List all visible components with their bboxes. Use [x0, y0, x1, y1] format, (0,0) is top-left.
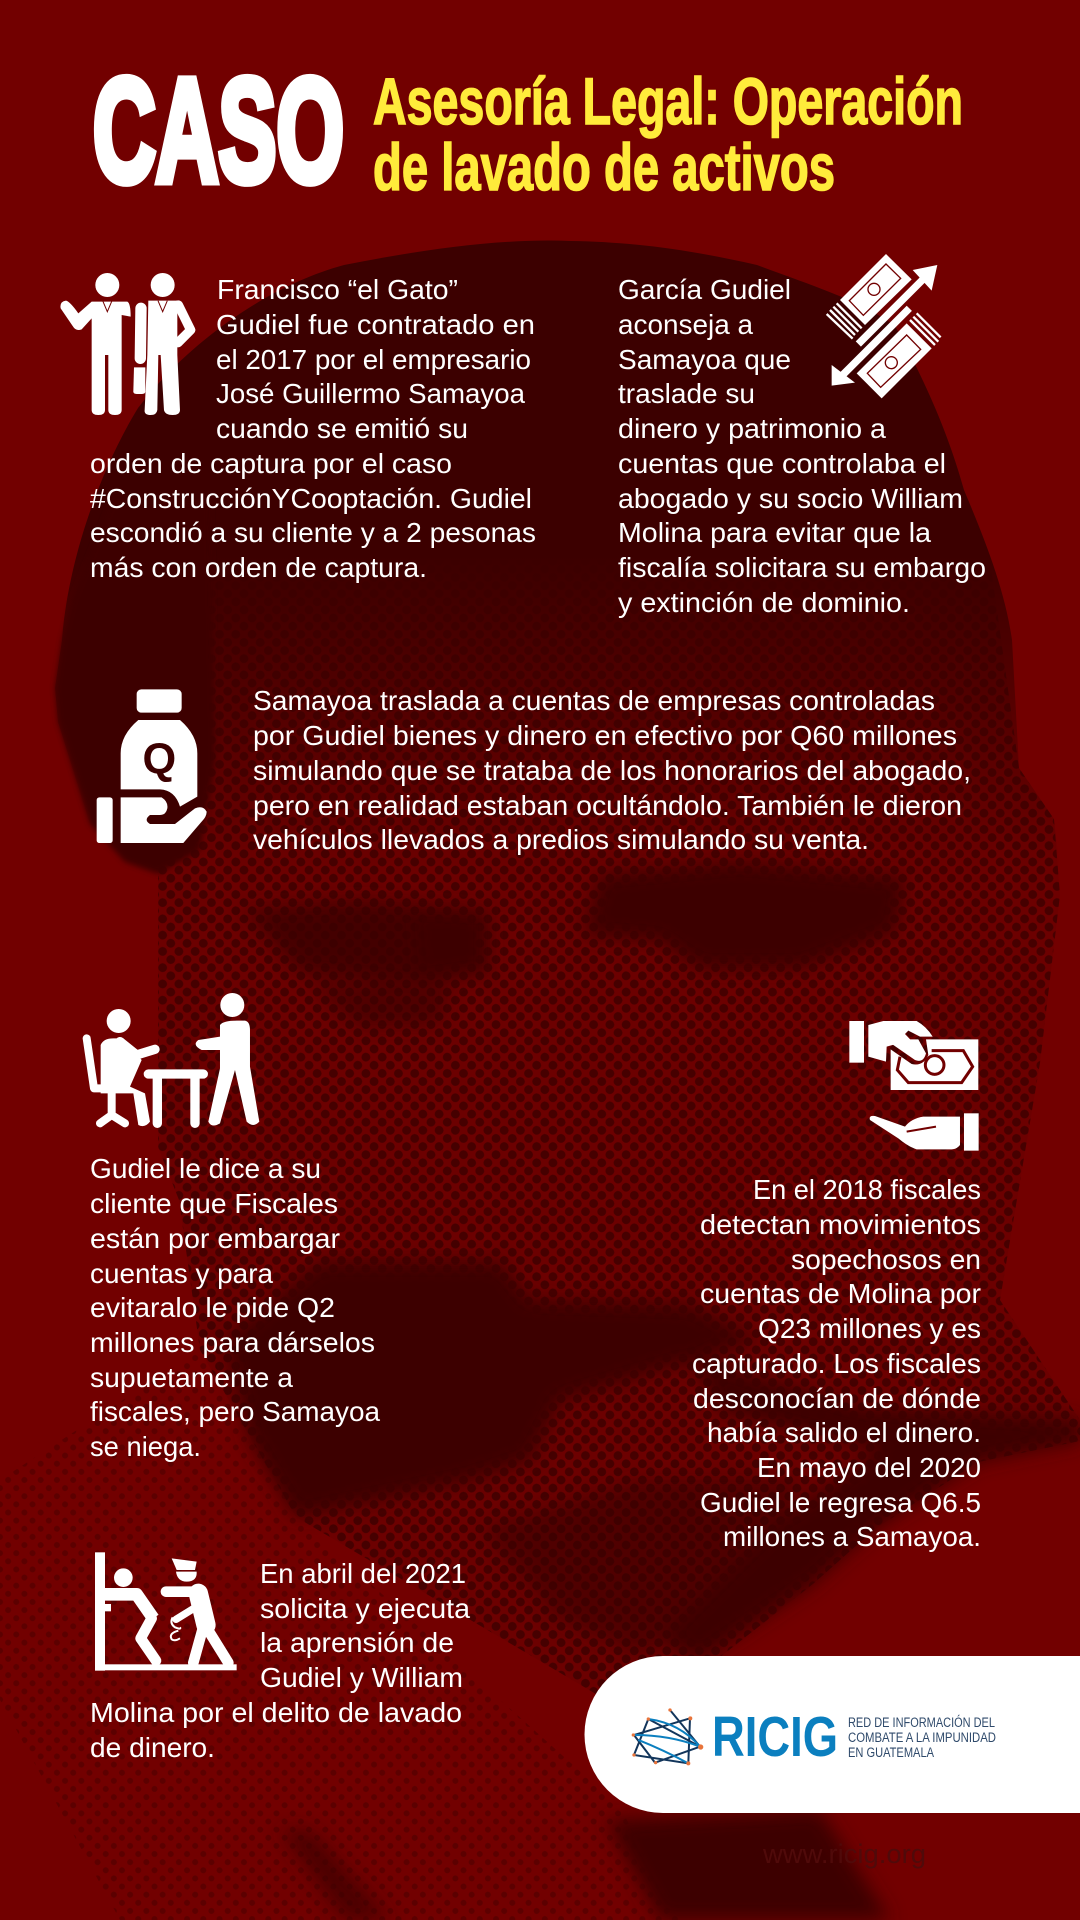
text: En el 2018: En el 2018 fiscales: [753, 1174, 981, 1205]
text: Gudiel le dice: cuentas y para: [90, 1258, 273, 1289]
text: Francisco Gudiel: cuando se emitió su: [216, 413, 468, 444]
text: Francisco Gudiel: Francisco “el Gato”: [217, 274, 458, 305]
text: Francisco Gudiel: Gudiel fue contratado en: [216, 309, 535, 340]
logo panel: [584, 1656, 1080, 1813]
icon: money bag in hand: [97, 689, 207, 843]
text: García Gudiel: [618, 274, 986, 618]
logo tagline: EN GUATEMALA: [848, 1745, 934, 1760]
text: Gudiel le dice: Gudiel le dice a su: [90, 1153, 321, 1184]
text: García Gudiel: fiscalía solicitara su embargo: [618, 552, 986, 583]
text: En abril: solicita y ejecuta: [260, 1593, 470, 1624]
text: Francisco Gudiel: #ConstrucciónYCooptación. Gudiel: [90, 483, 532, 514]
text: García Gudiel: cuentas que controlaba el: [618, 448, 946, 479]
text: En el 2018: Gudiel le regresa Q6.5: [700, 1487, 981, 1518]
icon: hands exchanging money: [849, 1021, 979, 1151]
text: Francisco Gudiel: José Guillermo Samayoa: [216, 378, 525, 409]
text: Francisco Gudiel: [90, 274, 536, 583]
title: CASO: CASO: [93, 49, 344, 213]
text: Samayoa traslada: [253, 685, 971, 855]
text: García Gudiel: traslade su: [618, 378, 755, 409]
text: García Gudiel: dinero y patrimonio a: [618, 413, 886, 444]
text: García Gudiel: Samayoa que: [618, 344, 791, 375]
text: García Gudiel: aconseja a: [618, 309, 753, 340]
text: Francisco Gudiel: el 2017 por el empresario: [216, 344, 531, 375]
text: En abril: de dinero.: [90, 1732, 215, 1763]
text: Francisco Gudiel: más con orden de captura.: [90, 552, 427, 583]
text: Francisco Gudiel: orden de captura por el caso: [90, 448, 452, 479]
text: En abril: Gudiel y William: [260, 1662, 463, 1693]
logo tagline: [848, 1715, 996, 1760]
text: En el 2018: desconocían de dónde: [693, 1383, 981, 1414]
text: Samayoa traslada: por Gudiel bienes y dinero en efectivo por Q60 millones: [253, 720, 957, 751]
website url: www.ricig.org: [762, 1839, 926, 1869]
text: En abril: En abril del 2021: [260, 1558, 466, 1589]
logo wordmark: RICIG: [712, 1705, 838, 1769]
icon: money transfer: [827, 254, 941, 398]
text: En el 2018: sopechosos en: [791, 1244, 981, 1275]
text: En el 2018: había salido el dinero.: [707, 1417, 981, 1448]
icon: two businessmen: [60, 273, 191, 415]
text: Samayoa traslada: vehículos llevados a predios simulando su venta.: [253, 824, 869, 855]
text: En el 2018: Q23 millones y es: [758, 1313, 981, 1344]
text: Gudiel le dice: fiscales, pero Samayoa: [90, 1396, 380, 1427]
text: Gudiel le dice: evitaralo le pide Q2: [90, 1292, 335, 1323]
text: Gudiel le dice: están por embargar: [90, 1223, 340, 1254]
text: Gudiel le dice: cliente que Fiscales: [90, 1188, 338, 1219]
text: García Gudiel: Molina para evitar que la: [618, 517, 931, 548]
text: En el 2018: capturado. Los fiscales: [692, 1348, 981, 1379]
text: García Gudiel: García Gudiel: [618, 274, 791, 305]
icon: RICIG star: [632, 1708, 703, 1765]
icon: money bag in hand: Q: [142, 735, 176, 783]
text: En el 2018: [692, 1174, 981, 1552]
text: En el 2018: millones a Samayoa.: [723, 1521, 981, 1552]
text: Gudiel le dice: [90, 1153, 380, 1462]
text: En abril: la aprensión de: [260, 1627, 454, 1658]
text: Samayoa traslada: Samayoa traslada a cuentas de empresas controladas: [253, 685, 935, 716]
text: Francisco Gudiel: escondió a su cliente y a 2 pesonas: [90, 517, 536, 548]
logo tagline: RED DE INFORMACIÓN DEL: [848, 1715, 995, 1730]
icon: arrest: [95, 1552, 237, 1671]
text: Gudiel le dice: se niega.: [90, 1431, 201, 1462]
text: Gudiel le dice: supuetamente a: [90, 1362, 293, 1393]
text: Gudiel le dice: millones para dárselos: [90, 1327, 375, 1358]
text: Samayoa traslada: pero en realidad estaban ocultándolo. También le dieron: [253, 790, 962, 821]
text: En el 2018: En mayo del 2020: [757, 1452, 981, 1483]
icon: meeting at desk: [87, 993, 259, 1126]
text: García Gudiel: abogado y su socio William: [618, 483, 963, 514]
logo tagline: COMBATE A LA IMPUNIDAD: [848, 1730, 996, 1745]
subtitle: de lavado de activos: [373, 130, 835, 204]
subtitle: [373, 64, 963, 204]
text: García Gudiel: y extinción de dominio.: [618, 587, 910, 618]
text: Samayoa traslada: simulando que se trataba de los honorarios del abogado,: [253, 755, 971, 786]
text: En el 2018: detectan movimientos: [700, 1209, 981, 1240]
text: En abril: [90, 1558, 470, 1763]
text: En el 2018: cuentas de Molina por: [700, 1278, 981, 1309]
text: En abril: Molina por el delito de lavado: [90, 1697, 462, 1728]
